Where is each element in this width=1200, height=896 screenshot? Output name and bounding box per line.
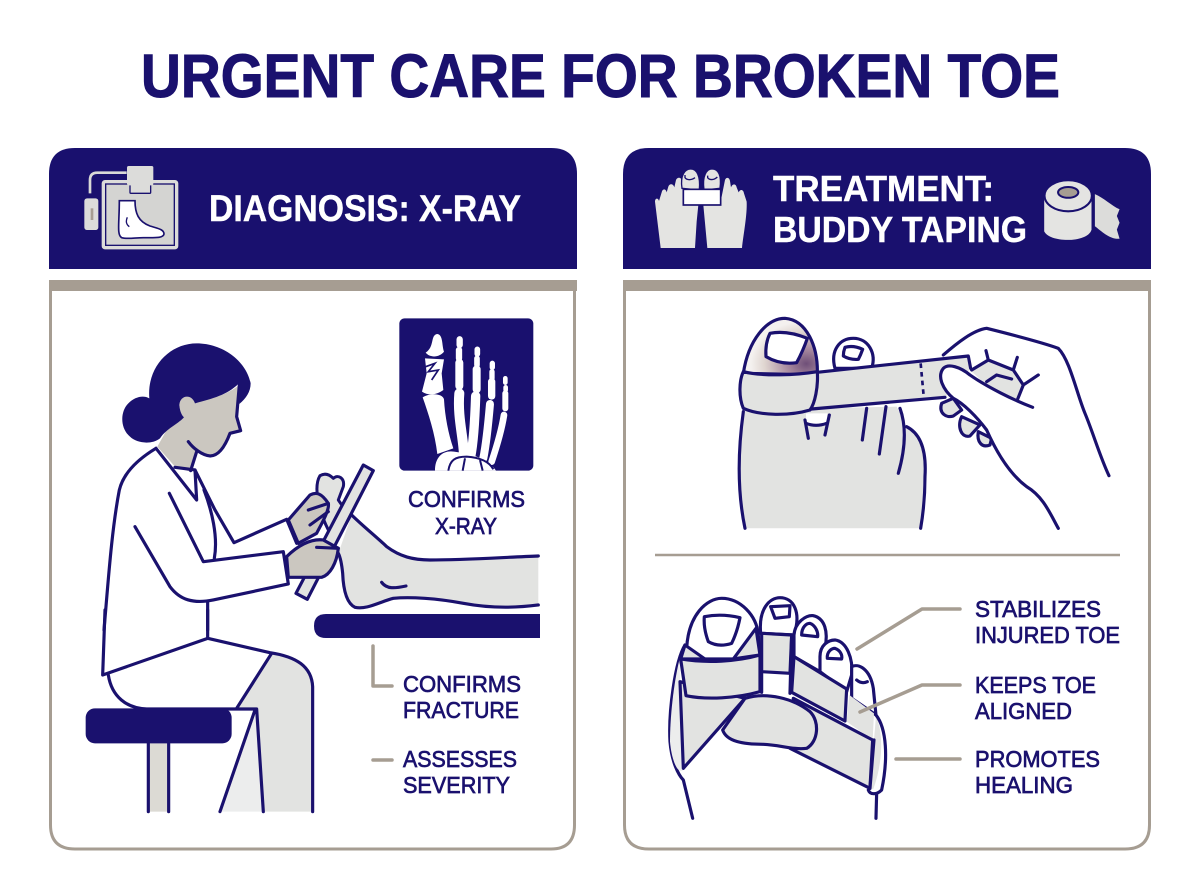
icon: x-ray machine — [84, 166, 178, 249]
tape strip — [812, 356, 971, 409]
doctor upper body — [104, 343, 373, 630]
illustration: applying tape to toes — [739, 318, 1109, 528]
face — [157, 385, 241, 472]
label: confirms fracture — [403, 671, 521, 723]
label: promotes healing: PROMOTES — [975, 746, 1100, 772]
callout line: promotes healing — [896, 757, 960, 761]
icon: taped toes — [655, 169, 747, 248]
label: confirms x-ray: CONFIRMS — [408, 486, 525, 512]
illustration: doctor examining foot — [86, 343, 540, 812]
fingers — [970, 360, 1023, 402]
header bar: diagnosis — [49, 148, 577, 269]
hand bottom — [287, 540, 338, 577]
second toe — [760, 598, 797, 635]
hand top — [288, 493, 328, 543]
label: confirms x-ray: X-RAY — [435, 513, 497, 539]
fifth toe — [852, 666, 876, 715]
header bar: treatment — [623, 148, 1151, 269]
label: assesses severity — [403, 746, 517, 798]
panel: diagnosis — [49, 148, 577, 849]
label: promotes healing: HEALING — [975, 772, 1073, 798]
label: stabilizes injured toe: STABILIZES — [975, 596, 1101, 622]
callout line: stabilizes — [857, 609, 960, 649]
x-ray image — [399, 318, 533, 471]
header text: treatment — [773, 168, 1027, 250]
lower triangle wrap — [680, 682, 745, 768]
illustration: buddy-taped foot — [670, 598, 886, 818]
foot and leg — [338, 515, 538, 608]
header text: treatment: BUDDY TAPING — [773, 209, 1027, 250]
label: promotes healing — [975, 746, 1100, 798]
label: keeps toe aligned: ALIGNED — [975, 698, 1072, 724]
plate — [296, 465, 373, 599]
tape wrap — [740, 372, 818, 414]
left side of foot — [670, 645, 693, 818]
toe strap — [792, 657, 847, 721]
big toe — [743, 318, 817, 375]
fourth toe — [820, 640, 852, 692]
label: confirms fracture: CONFIRMS — [403, 671, 521, 697]
hand — [943, 328, 1109, 476]
label: keeps toe aligned — [975, 672, 1096, 724]
right side of foot — [870, 717, 881, 789]
toes behind plate — [317, 474, 350, 547]
divider — [655, 554, 1120, 556]
callout line: confirms fracture — [373, 646, 392, 686]
nail — [766, 332, 807, 363]
label: stabilizes injured toe: INJURED TOE — [975, 622, 1120, 648]
exam table — [314, 614, 540, 638]
band — [623, 280, 1151, 291]
label: confirms fracture: FRACTURE — [403, 697, 519, 723]
third toe — [794, 616, 826, 672]
band — [49, 280, 577, 291]
header text: treatment: TREATMENT: — [773, 168, 994, 209]
callout line: assesses severity — [373, 758, 392, 762]
label: assesses severity: ASSESSES — [403, 746, 517, 772]
panel frame: treatment — [624, 285, 1150, 849]
label: stabilizes injured toe — [975, 596, 1120, 648]
label: confirms x-ray — [408, 486, 525, 539]
callout line: keeps aligned — [860, 685, 960, 712]
foot — [739, 407, 925, 528]
label: assesses severity: SEVERITY — [403, 772, 510, 798]
band across foot — [790, 698, 873, 788]
header text: diagnosis: DIAGNOSIS: X-RAY — [209, 188, 521, 229]
panel: treatment — [623, 148, 1151, 849]
icon: tape roll — [1044, 180, 1120, 240]
big toe — [681, 598, 760, 659]
hair — [122, 343, 251, 443]
second toe — [834, 338, 873, 368]
title: URGENT CARE FOR BROKEN TOE — [141, 42, 1060, 110]
panel frame: diagnosis — [50, 285, 574, 849]
label: keeps toe aligned: KEEPS TOE — [975, 672, 1096, 698]
big toe wrap — [681, 655, 760, 698]
doctor lower body and stool — [86, 610, 313, 812]
coat — [104, 448, 156, 630]
ball of foot pad — [723, 696, 817, 749]
